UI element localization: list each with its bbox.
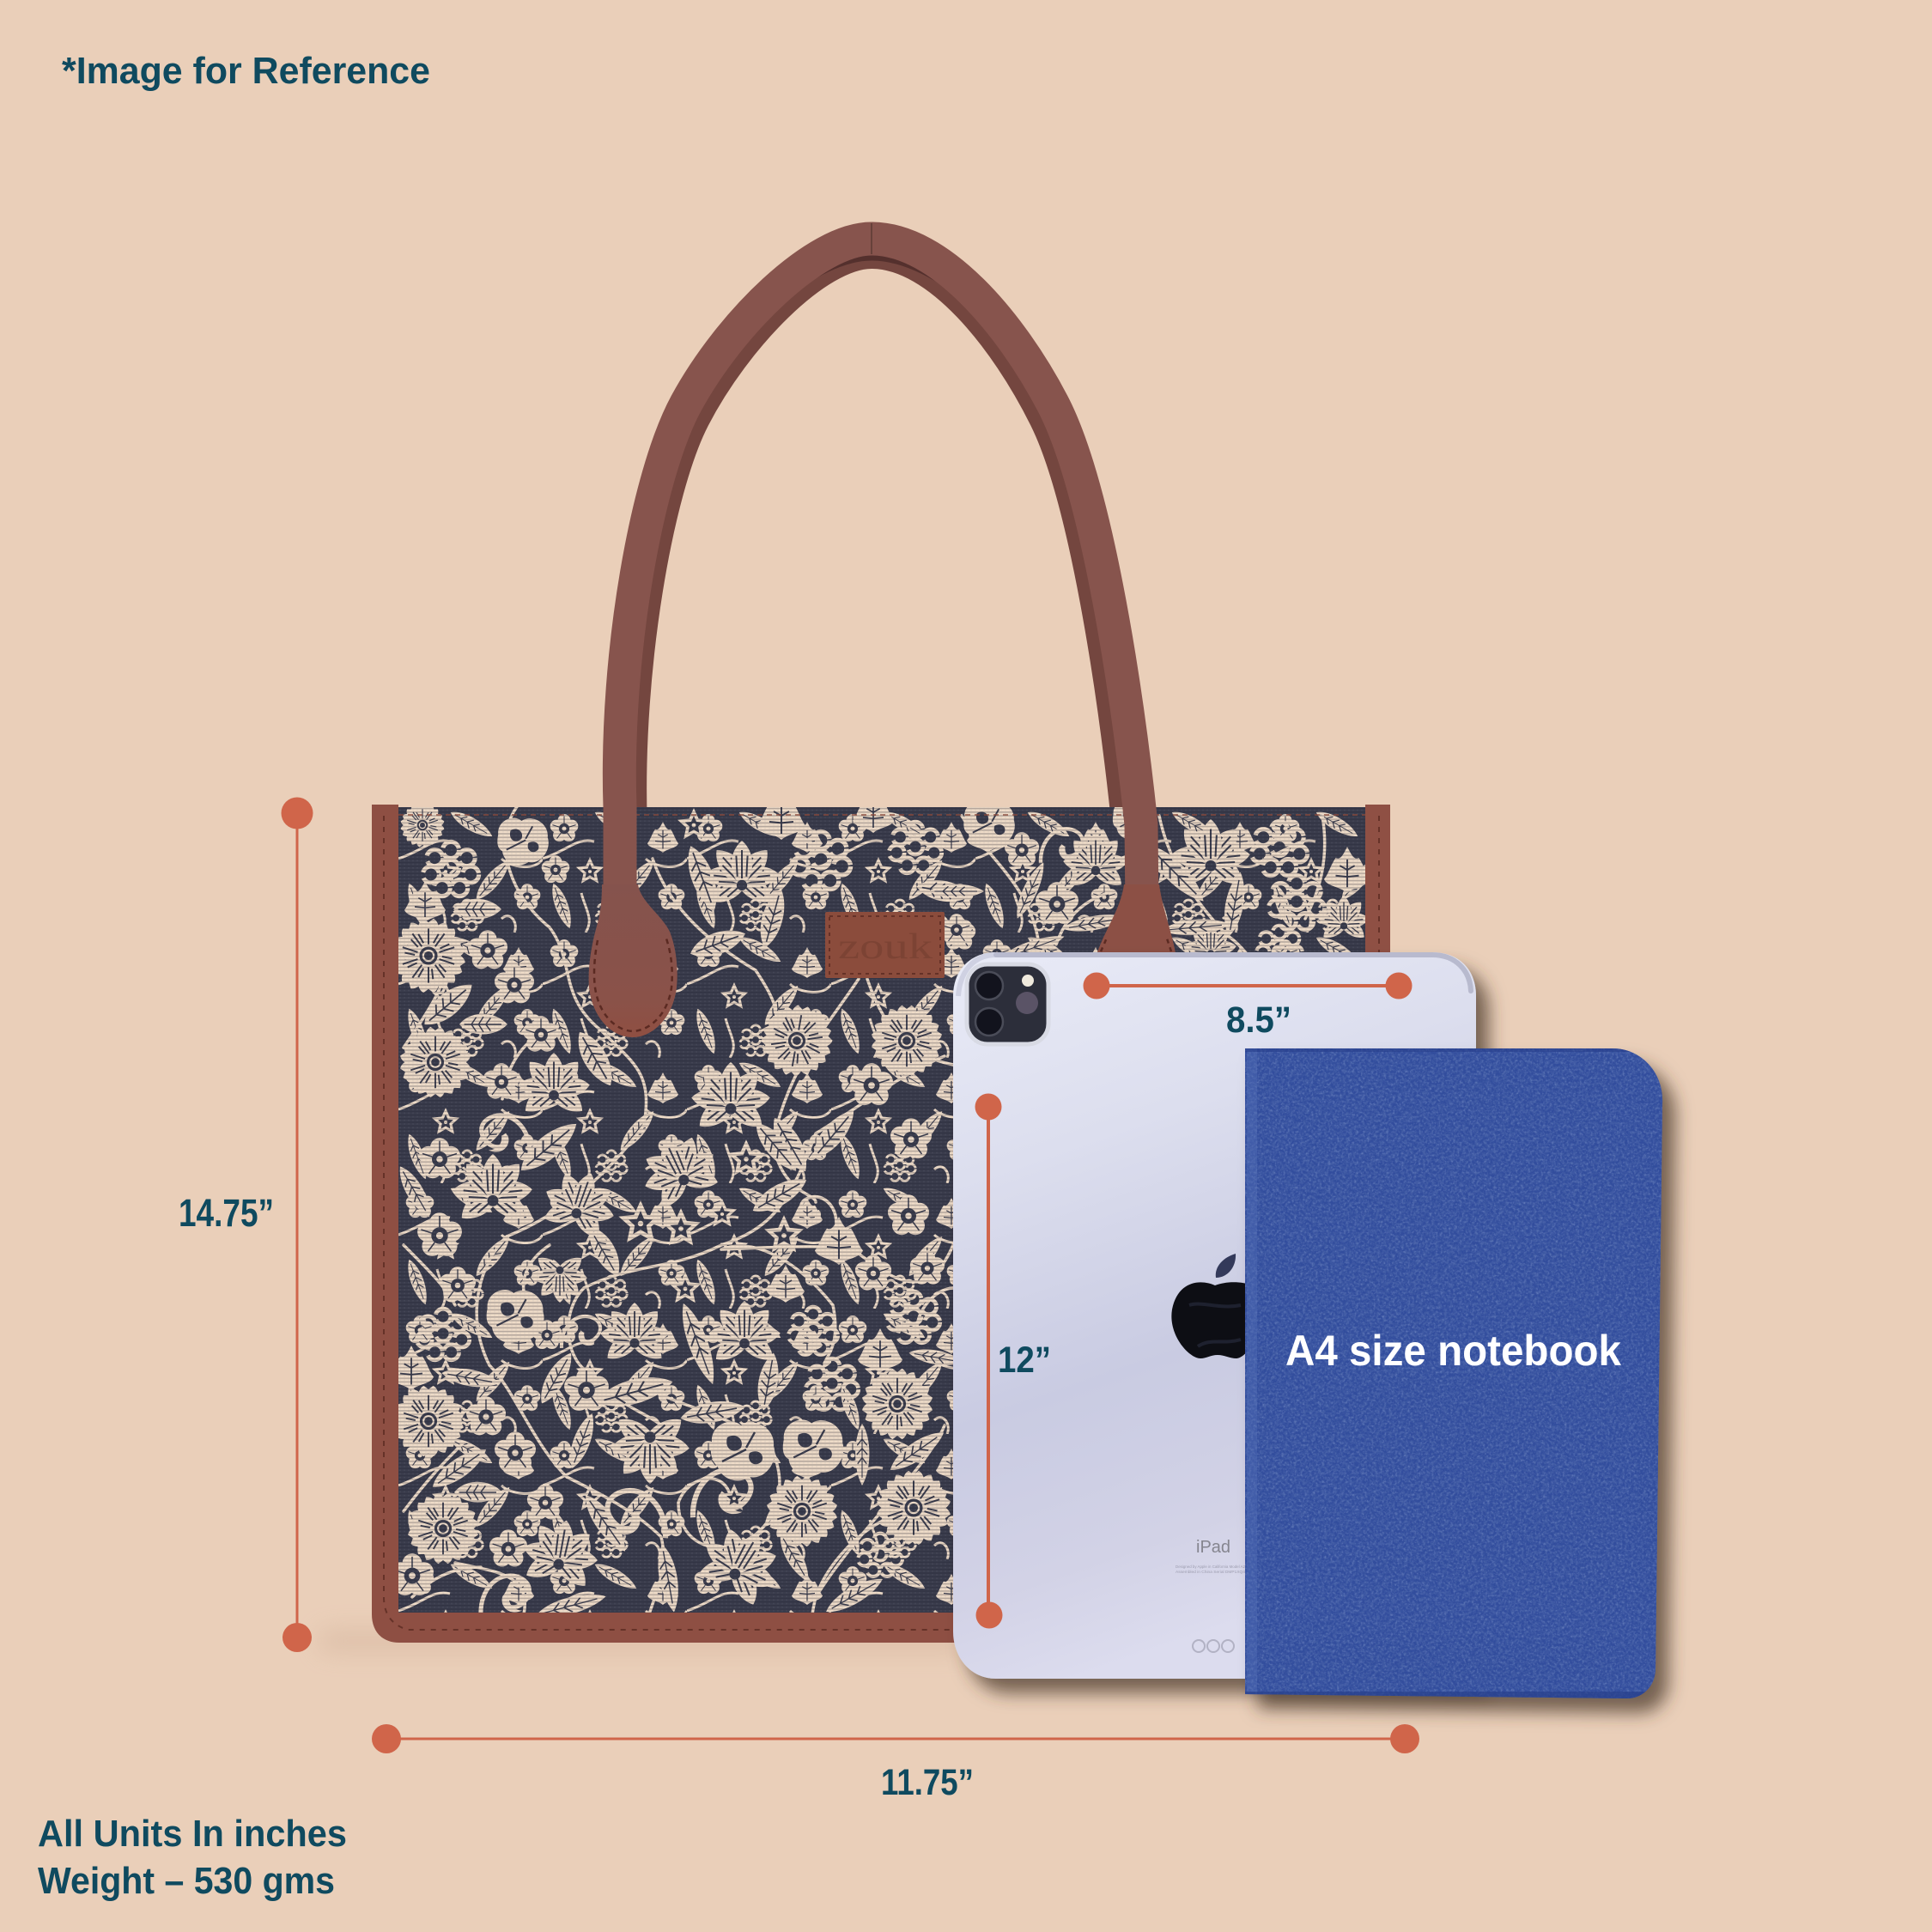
fabric rib texture <box>398 807 1365 1614</box>
dimension: bag width 11.75: 11.75” <box>881 1762 974 1803</box>
dimension: iPad height 12 <box>975 1094 1051 1628</box>
filler sprigs between the large flowers <box>398 807 1365 1614</box>
brand label: zouk leather patch <box>825 912 945 978</box>
handle: front with stitched tabs <box>589 223 1176 1037</box>
right tab <box>1096 884 1176 957</box>
iPad regulatory marks <box>1193 1640 1234 1652</box>
iPad wordmark: iPad <box>1196 1538 1230 1557</box>
footnote: units and weight: Weight – 530 gms <box>38 1860 335 1902</box>
floor shadow under bag <box>318 1630 970 1652</box>
footnote: units and weight: All Units In inches <box>38 1813 347 1855</box>
iPad fine print <box>1176 1564 1246 1574</box>
note: image for reference: *Image for Reference <box>62 50 430 92</box>
apple logo <box>1171 1254 1254 1358</box>
iPad <box>953 952 1476 1679</box>
dimension: bag width 11.75 <box>372 1724 1419 1803</box>
dimension: iPad width 8.5: 8.5” <box>1226 999 1291 1041</box>
handle: back <box>632 253 1127 873</box>
top stitching <box>398 814 1365 816</box>
brand label: zouk leather patch: zouk <box>838 927 933 967</box>
dimension: bag height 14.75 <box>179 797 313 1652</box>
iPad fine print: Designed by Apple in California Model A2 <box>1176 1564 1245 1569</box>
dimension: iPad width 8.5 <box>1084 972 1412 1041</box>
dimension: iPad height 12: 12” <box>998 1340 1051 1381</box>
dimension: bag height 14.75: 14.75” <box>179 1191 274 1235</box>
iPad fine print: Assembled in China Serial DMP1XQ4 <box>1176 1570 1246 1574</box>
left tab <box>589 884 677 1037</box>
notebook: A4 size <box>1245 1048 1666 1701</box>
tote bag <box>372 792 1390 1643</box>
fabric panel with floral print <box>389 792 1370 1631</box>
leather texture <box>1245 1048 1666 1701</box>
floral print: flowers, leaves and berries <box>389 792 1370 1623</box>
footnote: units and weight <box>38 1813 347 1902</box>
notebook label: A4 size notebook <box>1285 1327 1621 1375</box>
floral vines <box>404 799 1325 1631</box>
leather trim: left, bottom and right binding <box>372 805 1390 1643</box>
camera module <box>967 964 1048 1044</box>
